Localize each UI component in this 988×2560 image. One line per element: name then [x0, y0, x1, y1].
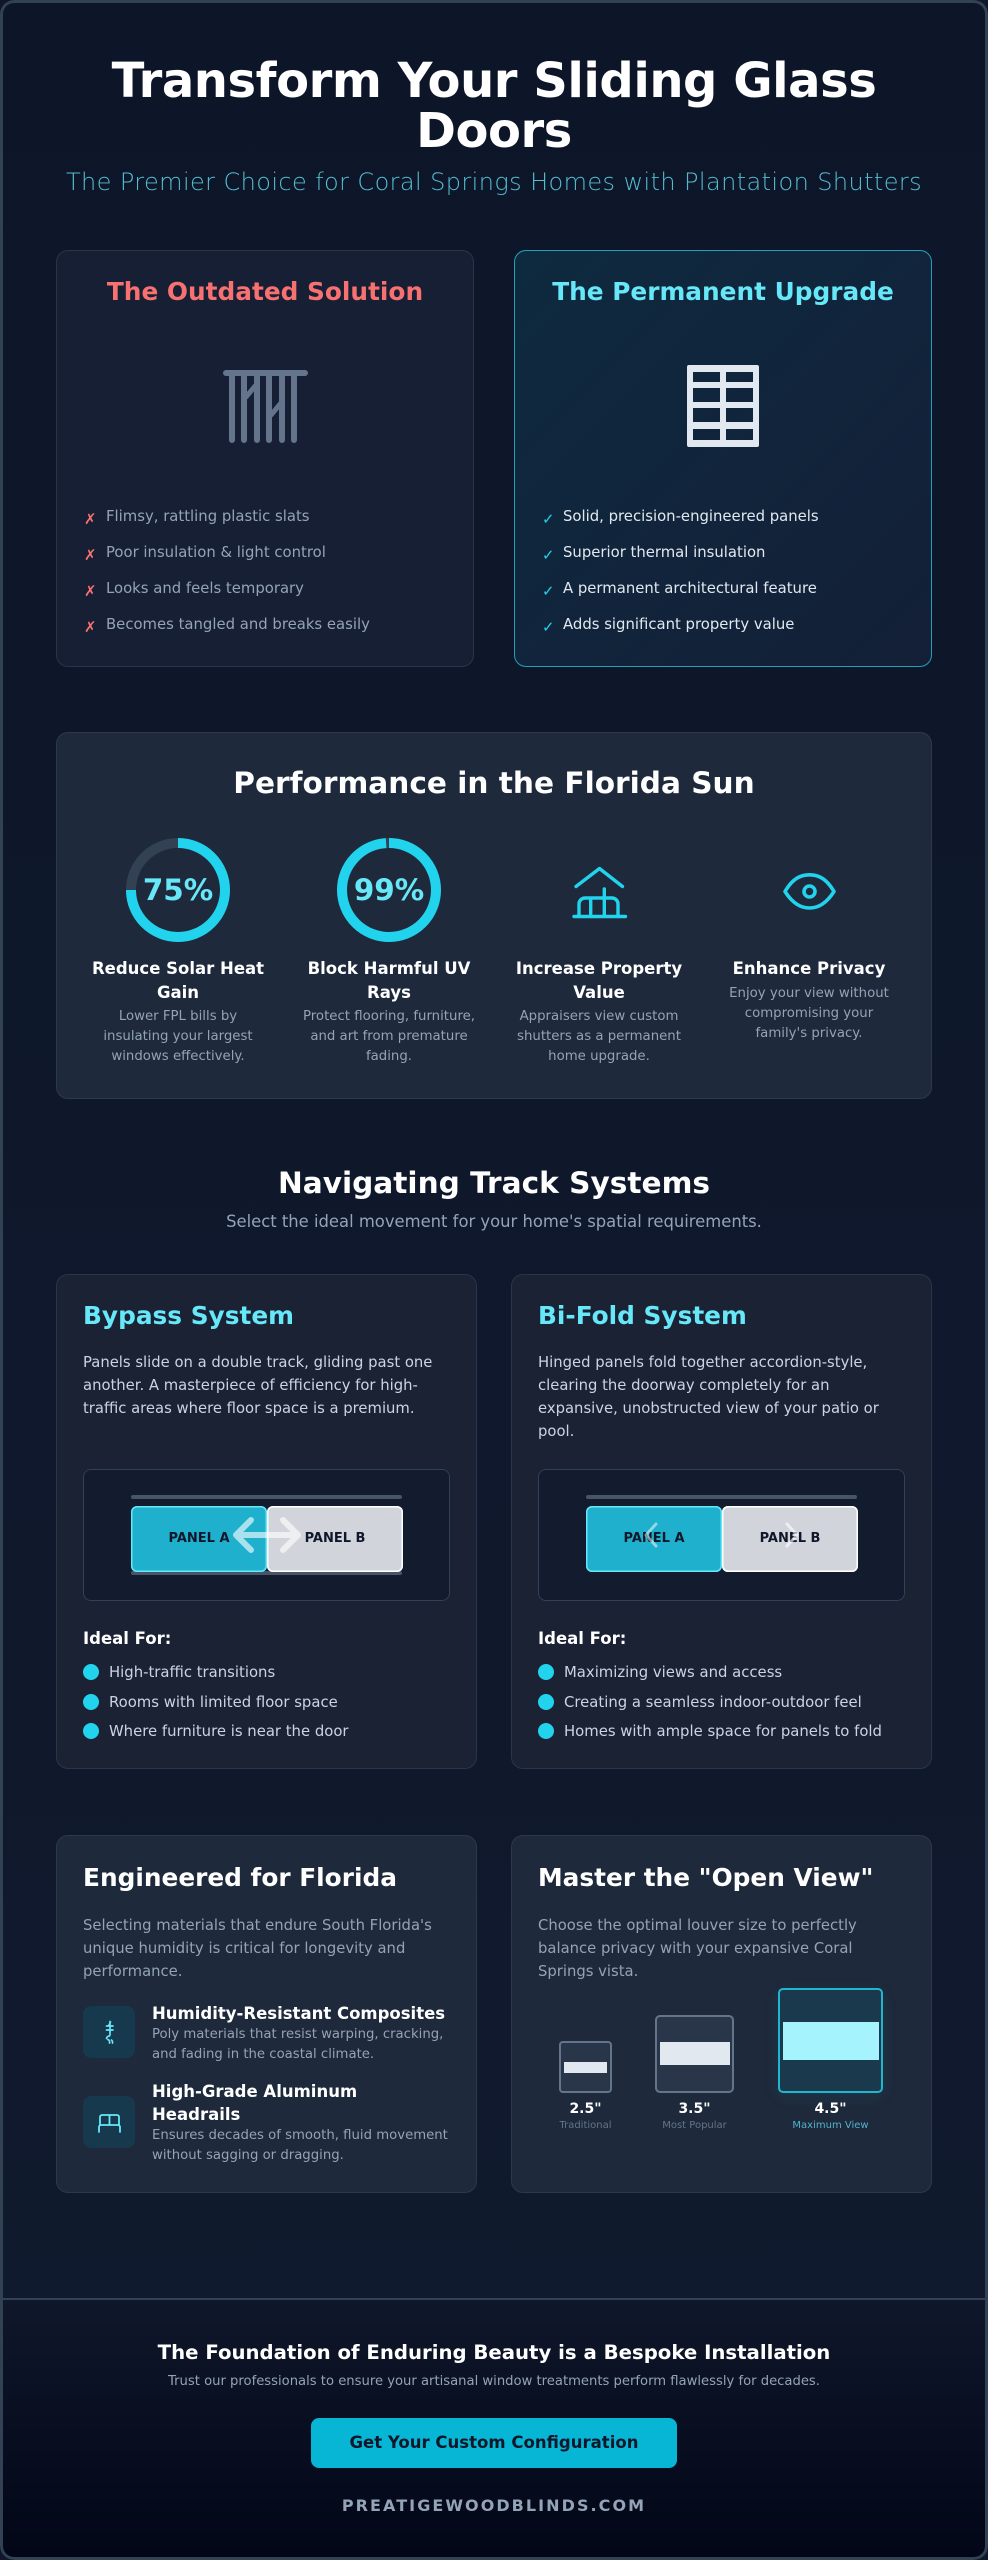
item: ✓	[542, 618, 554, 636]
caption: Maximum View	[792, 2120, 869, 2131]
feature: high-grade aluminum headrails	[83, 2080, 453, 2168]
description: shutters as a permanent	[517, 1029, 681, 1044]
icon: eye	[783, 873, 836, 910]
description: engineered: unique humidity is critical for longevity and	[83, 1940, 405, 1957]
item: High-traffic transitions	[109, 1663, 275, 1681]
label	[92, 959, 264, 1002]
item: Adds significant property value	[563, 615, 794, 633]
panel: bi-fold system	[511, 1274, 932, 1769]
description: open view: Springs vista.	[538, 1963, 638, 1980]
size: 2.5"	[569, 2101, 602, 2117]
button: get your custom configuration: Get Your Custom Configuration	[349, 2433, 639, 2452]
arrow: bidirectional	[233, 1517, 301, 1553]
description: Enjoy your view without	[729, 986, 889, 1001]
track: top	[131, 1495, 402, 1499]
item: Maximizing views and access	[564, 1663, 782, 1681]
label: Gain	[157, 983, 199, 1002]
subheading: track systems: Select the ideal movement for your home's spatial requirements.	[226, 1212, 762, 1231]
description: bi-fold	[538, 1354, 879, 1440]
heading: performance: Performance in the Florida Sun	[233, 766, 755, 800]
description: fading.	[366, 1049, 412, 1064]
title: High-Grade Aluminum	[152, 2082, 357, 2101]
description: open view: balance privacy with your expansive Coral	[538, 1940, 853, 1957]
panel a	[131, 1506, 267, 1572]
slat	[660, 2042, 730, 2065]
chart: 75% ring: 75%	[143, 873, 213, 907]
panel a: PANEL A	[168, 1531, 230, 1546]
text: without sagging or dragging.	[152, 2148, 344, 2163]
description: engineered	[83, 1914, 432, 1983]
heading: open view: Master the "Open View"	[538, 1863, 873, 1892]
louver frame	[559, 2041, 612, 2093]
title: Doors	[416, 102, 572, 158]
icon: house with shutters	[572, 866, 628, 918]
description: bypass: Panels slide on a double track, gliding past one	[83, 1354, 432, 1371]
item	[538, 1662, 908, 1682]
heading: bypass: Bypass System	[83, 1301, 294, 1330]
footer heading: The Foundation of Enduring Beauty is a Bespoke Installation	[158, 2341, 830, 2364]
title: Humidity-Resistant Composites	[152, 2004, 445, 2023]
item: ✗	[84, 546, 96, 564]
text: Ensures decades of smooth, fluid movement	[152, 2128, 448, 2143]
item: ✓	[542, 510, 554, 528]
louver: 4.5 inch highlighted	[778, 1988, 883, 2136]
stat: block harmful uv rays	[303, 838, 475, 1064]
description: bi-fold: pool.	[538, 1423, 574, 1440]
heading: engineered: Engineered for Florida	[83, 1863, 397, 1892]
description: bi-fold: expansive, unobstructed view of your patio or	[538, 1400, 879, 1417]
icon: composite	[83, 2006, 135, 2058]
diagram: bi-fold track	[538, 1469, 905, 1601]
description: engineered: performance.	[83, 1963, 182, 1980]
label: Increase Property	[516, 959, 682, 978]
panel b: PANEL B	[305, 1531, 365, 1546]
description	[729, 986, 889, 1041]
text	[152, 2126, 448, 2166]
panel b: PANEL B	[760, 1531, 820, 1546]
louver: 2.5 inch	[559, 2041, 612, 2136]
description: compromising your	[745, 1006, 873, 1021]
size: 4.5"	[814, 2101, 847, 2117]
slat	[783, 2022, 878, 2060]
louver frame	[655, 2014, 734, 2093]
description: bi-fold: Hinged panels fold together accordion-style,	[538, 1354, 867, 1371]
panel: bypass system	[56, 1274, 477, 1769]
item: ✗	[84, 510, 96, 528]
item: Superior thermal insulation	[563, 543, 765, 561]
heading: ideal for: Ideal For:	[83, 1629, 171, 1648]
chart: 75% ring	[126, 838, 230, 942]
title	[152, 2080, 357, 2126]
description: Appraisers view custom	[520, 1009, 678, 1024]
description: insulating your largest	[103, 1029, 253, 1044]
panel b	[267, 1506, 403, 1572]
icon: plantation shutter	[687, 365, 759, 447]
chart: 99% ring: 99%	[354, 873, 424, 907]
description: open view: Choose the optimal louver size to perfectly	[538, 1917, 857, 1934]
track: top	[586, 1495, 857, 1499]
item: Homes with ample space for panels to fold	[564, 1722, 882, 1740]
description: and art from premature	[310, 1029, 468, 1044]
text	[152, 2025, 443, 2065]
item: Where furniture is near the door	[109, 1722, 349, 1740]
list: outdated drawbacks	[84, 507, 370, 636]
footer	[0, 2298, 988, 2560]
label: Enhance Privacy	[733, 959, 885, 978]
panel: performance in the florida sun	[56, 732, 932, 1099]
description: family's privacy.	[756, 1026, 862, 1041]
panels	[131, 1506, 403, 1572]
chart: 99% ring	[337, 838, 441, 942]
item: Flimsy, rattling plastic slats	[106, 507, 310, 525]
description: bypass: another. A masterpiece of efficiency for high-	[83, 1377, 418, 1394]
panel b	[722, 1506, 858, 1572]
description	[517, 1009, 681, 1064]
item: Looks and feels temporary	[106, 579, 304, 597]
arrow: fold right	[786, 1522, 798, 1548]
feature: humidity-resistant composites	[83, 2002, 453, 2068]
item: Poor insulation & light control	[106, 543, 326, 561]
title	[112, 53, 876, 158]
description: bi-fold: clearing the doorway completely for an	[538, 1377, 829, 1394]
icon: broken blinds	[223, 370, 308, 443]
title: Headrails	[152, 2105, 240, 2124]
description: Protect flooring, furniture,	[303, 1009, 475, 1024]
size: 3.5"	[678, 2101, 711, 2117]
description: Lower FPL bills by	[119, 1009, 237, 1024]
list: bypass ideal for	[83, 1663, 349, 1740]
heading: permanent upgrade: The Permanent Upgrade	[552, 277, 894, 306]
label	[308, 959, 470, 1002]
heading: ideal for: Ideal For:	[538, 1629, 626, 1648]
list: bi-fold ideal for	[538, 1663, 882, 1740]
description: bypass: traffic areas where floor space is a premium.	[83, 1400, 415, 1417]
louver: 3.5 inch	[655, 2014, 734, 2136]
description: bypass	[83, 1354, 432, 1417]
label: Reduce Solar Heat	[92, 959, 264, 978]
diagram: bypass track	[83, 1469, 450, 1601]
heading: bi-fold: Bi-Fold System	[538, 1301, 747, 1330]
button: get your custom configuration	[311, 2418, 677, 2468]
subtitle: The Premier Choice for Coral Springs Homes with Plantation Shutters	[66, 168, 922, 196]
item: Rooms with limited floor space	[109, 1692, 338, 1710]
description: home upgrade.	[548, 1049, 650, 1064]
description	[303, 1009, 475, 1064]
panel a: PANEL A	[623, 1531, 685, 1546]
label: Block Harmful UV	[308, 959, 470, 978]
item: Creating a seamless indoor-outdoor feel	[564, 1692, 862, 1710]
item: A permanent architectural feature	[563, 579, 817, 597]
stat: increase property value	[516, 866, 682, 1064]
text: Poly materials that resist warping, cracking,	[152, 2027, 443, 2042]
slat	[564, 2062, 607, 2073]
panel: the outdated solution	[56, 250, 474, 667]
stat: enhance privacy	[729, 873, 889, 1041]
heading: navigating track systems: Navigating Track Systems	[278, 1166, 710, 1200]
description: windows effectively.	[111, 1049, 245, 1064]
arrow: fold left	[644, 1522, 658, 1548]
stat: reduce solar heat gain	[92, 838, 264, 1064]
list: upgrade benefits	[542, 507, 819, 636]
label: Rays	[367, 983, 411, 1002]
icon: headrail	[83, 2096, 135, 2148]
panel: master the open view	[511, 1835, 932, 2193]
item: Becomes tangled and breaks easily	[106, 615, 370, 633]
item: ✓	[542, 582, 554, 600]
caption: Traditional	[559, 2120, 612, 2131]
title: Transform Your Sliding Glass	[112, 53, 876, 109]
caption: Most Popular	[662, 2120, 727, 2131]
item: ✗	[84, 618, 96, 636]
label	[516, 959, 682, 1002]
panel a	[586, 1506, 722, 1572]
track: bottom	[131, 1571, 402, 1575]
item: ✗	[84, 582, 96, 600]
item: ✓	[542, 546, 554, 564]
footer text: Trust our professionals to ensure your artisanal window treatments perform flawlessly for decades.	[168, 2374, 820, 2389]
panel: the permanent upgrade	[514, 250, 932, 667]
panel: engineered for florida	[56, 1835, 477, 2193]
description	[103, 1009, 253, 1064]
panels	[586, 1506, 858, 1572]
heading: outdated solution: The Outdated Solution	[107, 277, 423, 306]
description: open view	[538, 1914, 857, 1983]
louver frame	[778, 1988, 883, 2093]
text: and fading in the coastal climate.	[152, 2047, 374, 2062]
description: engineered: Selecting materials that endure South Florida's	[83, 1917, 432, 1934]
item: Solid, precision-engineered panels	[563, 507, 819, 525]
website: PREATIGEWOODBLINDS.COM	[342, 2496, 646, 2515]
label: Value	[573, 983, 625, 1002]
